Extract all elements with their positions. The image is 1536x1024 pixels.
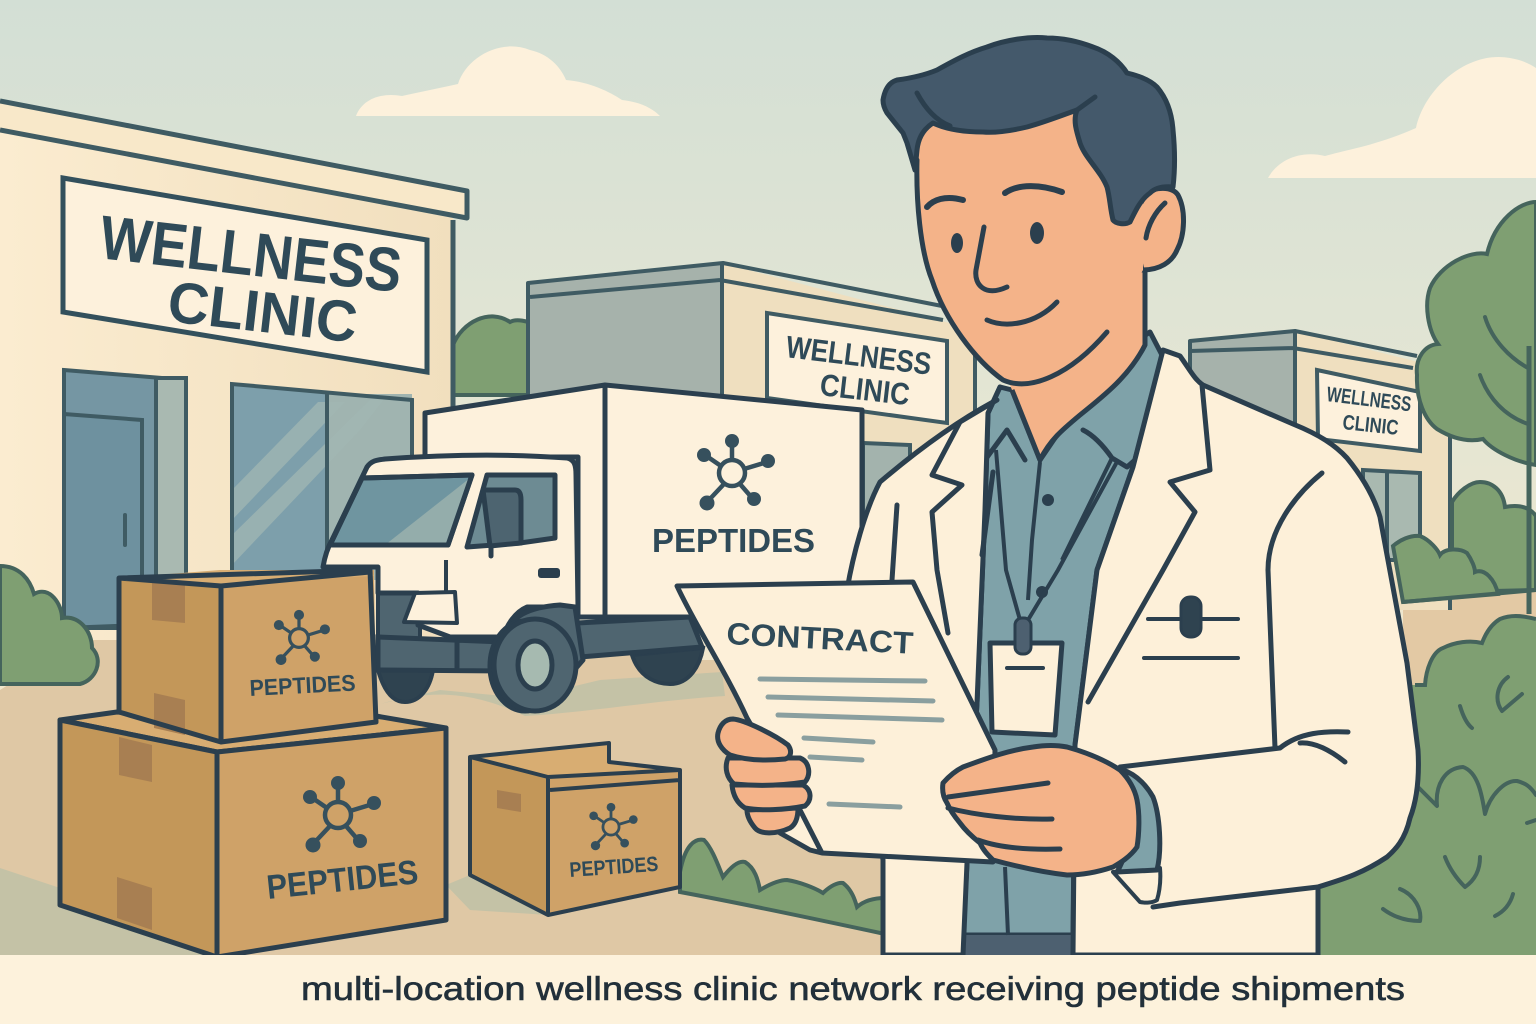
box: bottom large: PEPTIDES (265, 853, 420, 907)
shirt placket and buttons (1005, 458, 1112, 935)
caption strip (0, 955, 1536, 1024)
coat pocket (1144, 597, 1238, 658)
shrub: far right back (1452, 482, 1536, 592)
lab coat: left side (847, 402, 993, 955)
ear (1130, 188, 1184, 270)
truck logo (652, 434, 815, 559)
clinic door (64, 370, 186, 628)
lanyard and badge (990, 450, 1118, 735)
lab coat: right side (1073, 350, 1418, 955)
sign: left clinic: WELLNESS (96, 203, 405, 306)
clinic building: left (0, 101, 467, 640)
contract document: CONTRACT (726, 616, 914, 661)
coat sleeve lines (1120, 473, 1348, 907)
clinic building: right (1190, 331, 1450, 610)
sign: left clinic (63, 178, 427, 372)
truck cargo box (425, 385, 862, 617)
neck (1000, 270, 1145, 460)
man (677, 37, 1418, 955)
ground shadows (0, 672, 725, 957)
sign: middle clinic: CLINIC (818, 367, 912, 412)
truck chassis (577, 617, 702, 657)
clinic building: middle (528, 263, 976, 540)
contract document (677, 582, 995, 862)
shirt cuff (1113, 770, 1160, 903)
tree behind truck (453, 316, 580, 400)
caption strip: multi-location wellness clinic network receiving peptide shipments (301, 970, 1405, 1007)
bushes: bottom right (1318, 616, 1536, 955)
box: top stacked: PEPTIDES (249, 669, 356, 701)
truck cab (323, 455, 578, 637)
trousers (963, 935, 1073, 955)
sign: right clinic (1317, 370, 1420, 451)
shrub: left (0, 566, 98, 684)
head: hair (883, 37, 1174, 224)
box: top stacked (119, 570, 376, 742)
shirt collar (985, 355, 1163, 467)
facial features (927, 186, 1165, 324)
delivery truck (323, 385, 862, 711)
truck front wheel (503, 605, 583, 675)
window: right clinic (1363, 470, 1420, 560)
ground (0, 628, 900, 955)
box: bottom large (60, 712, 446, 957)
sign: middle clinic (767, 313, 947, 423)
left hand (718, 719, 810, 833)
box: small right: PEPTIDES (569, 853, 659, 882)
ground: right path (1403, 590, 1536, 700)
sign: right clinic: WELLNESS (1325, 383, 1413, 416)
boxes (60, 570, 680, 957)
coat lapels and seams (892, 385, 1210, 702)
tree: right (1417, 202, 1536, 614)
box: small right (470, 743, 680, 915)
green hedge (680, 840, 885, 934)
shirt (963, 332, 1163, 935)
shrub: right mid (1393, 536, 1498, 602)
sign: right clinic: CLINIC (1341, 411, 1400, 440)
clinic window (232, 384, 412, 580)
truck rear wheels (378, 648, 703, 702)
head: face (917, 110, 1143, 383)
window: middle clinic (863, 443, 910, 540)
sign: middle clinic: WELLNESS (784, 329, 933, 382)
truck logo: PEPTIDES (652, 522, 815, 559)
right hand (943, 746, 1139, 875)
sign: left clinic: CLINIC (165, 269, 361, 355)
cloud: right (1268, 57, 1536, 178)
cloud: center (356, 46, 660, 116)
